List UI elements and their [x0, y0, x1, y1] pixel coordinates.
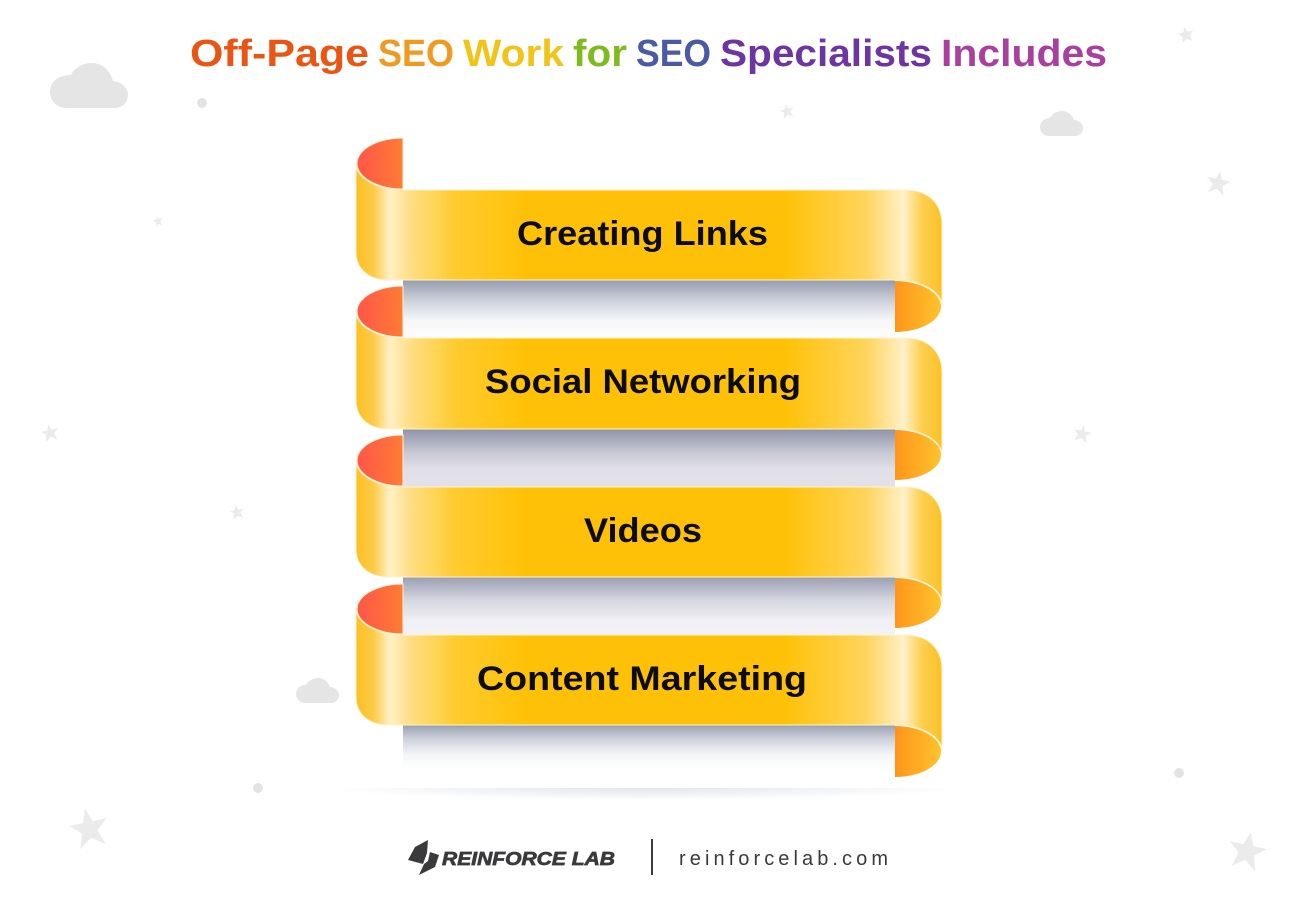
title: Includes [941, 33, 1107, 75]
title: Work [463, 33, 565, 75]
ribbon 1: Creating Links [356, 138, 942, 338]
icon: dot top left [197, 98, 207, 108]
footer logo [408, 839, 888, 875]
title [190, 33, 1107, 75]
icon: dot bottom left [253, 783, 263, 793]
title: Specialists [720, 33, 932, 75]
icon: star 6 [229, 504, 245, 520]
title: SEO [378, 33, 454, 75]
ribbon 3: Videos [356, 435, 942, 635]
ribbon 2: Social Networking [356, 286, 942, 487]
icon: star 7 [1072, 423, 1093, 444]
ribbon 3: Videos: Videos [584, 512, 702, 550]
ribbon 4: Content Marketing: Content Marketing [477, 660, 807, 698]
icon: star 4 [152, 215, 164, 227]
icon: cloud lower left [296, 678, 339, 703]
ribbon 4: Content Marketing [356, 584, 942, 777]
icon: star 2 [1177, 26, 1195, 44]
title: Off-Page [190, 33, 369, 75]
ribbon 2: Social Networking: Social Networking [485, 363, 801, 401]
icon: dot bottom right [1174, 768, 1184, 778]
icon: star 8 [66, 804, 112, 851]
icon: star 9 [1225, 828, 1270, 873]
logo wordmark: REINFORCE LAB [442, 849, 615, 869]
floor shadow [325, 788, 965, 800]
icon: star 5 [39, 422, 60, 443]
ribbon 1: Creating Links: Creating Links [517, 215, 768, 253]
title: for [573, 33, 627, 75]
icon: logo mark [408, 840, 439, 875]
icon: star 1 [779, 103, 795, 119]
website url: reinforcelab.com [679, 848, 888, 870]
title: SEO [636, 33, 711, 75]
icon: cloud top left [50, 63, 128, 108]
divider [651, 839, 653, 875]
icon: star 3 [1204, 169, 1232, 196]
icon: cloud top right [1040, 111, 1083, 136]
